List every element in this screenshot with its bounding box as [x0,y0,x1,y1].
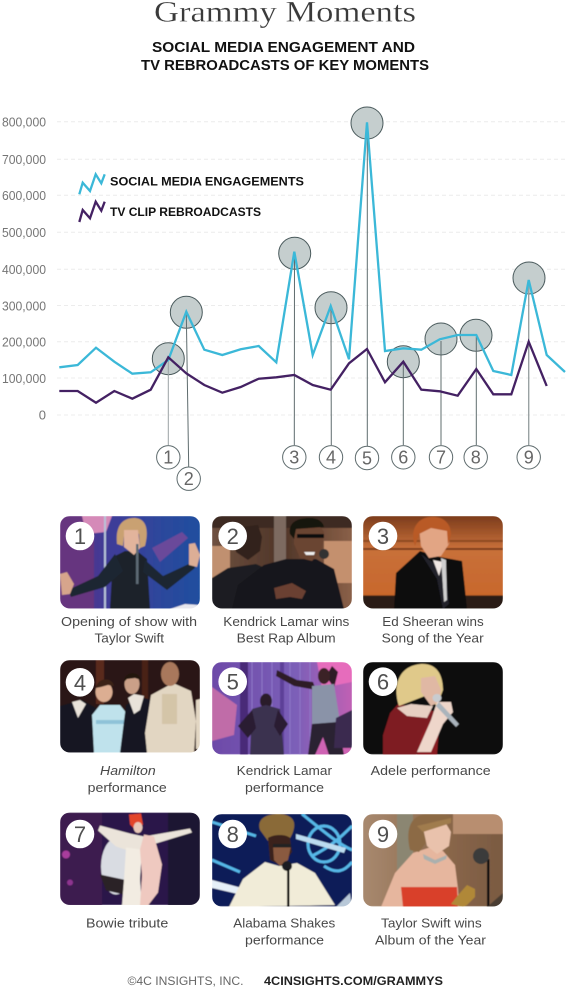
caption 5: performance [245,780,324,795]
caption 9 [375,916,487,948]
badge 4: 4 [74,670,86,695]
numbered markers: 3 [289,448,299,468]
caption 8: performance [245,932,324,948]
y axis labels: 800,000 [2,114,46,130]
caption 4: Hamilton [100,763,156,778]
footer [128,974,443,988]
caption 1: Taylor Swift [94,630,164,646]
caption 1 [61,614,197,646]
moment 6 [363,662,503,778]
footer: ©4C INSIGHTS, INC. [128,974,244,988]
photo: Kendrick Lamar performance [212,662,352,755]
tv clip rebroadcasts line [59,342,547,403]
photo: Bowie tribute [60,812,200,906]
numbered markers: 1 [163,448,173,468]
caption 9: Album of the Year [375,932,487,948]
caption 9: Taylor Swift wins [381,916,482,930]
y axis labels: 700,000 [2,152,46,167]
photo: Hamilton [60,660,200,753]
photo: Taylor Swift wins [363,814,503,907]
line chart [2,107,565,490]
footer: 4CINSIGHTS.COM/GRAMMYS [264,974,443,988]
badge 1: 1 [74,524,86,549]
moment 8 [212,814,352,948]
moment 9 [363,814,503,948]
numbered markers: 6 [398,448,408,468]
caption 2: Best Rap Album [237,630,336,646]
photo: Alabama Shakes [212,814,352,907]
caption 5 [237,763,333,795]
badge 2: 2 [227,524,239,549]
caption 2 [223,614,350,646]
numbered markers: 7 [436,448,446,468]
caption 8 [233,916,336,948]
badge 8: 8 [227,822,239,847]
moment 2 [212,516,352,646]
legend [79,174,304,222]
numbered markers: 5 [362,448,372,468]
moment 1 [60,516,200,646]
social media engagements line [59,122,565,375]
numbered markers: 2 [184,469,194,489]
moment 5 [212,662,352,795]
y axis labels [2,114,46,422]
caption 5: Kendrick Lamar [237,763,333,778]
highlight circles [152,107,545,378]
legend: TV CLIP REBROADCASTS [110,207,261,219]
leader lines [168,125,529,467]
subtitle: TV REBROADCASTS OF KEY MOMENTS [141,58,429,74]
badge 7: 7 [74,822,86,847]
numbered markers: 4 [326,448,336,468]
photo: Adele performance [363,662,503,755]
caption 8: Alabama Shakes [233,916,336,930]
caption 4 [88,763,167,795]
y axis labels: 100,000 [2,371,46,386]
y axis labels: 200,000 [2,334,46,350]
caption 3 [382,614,484,646]
y axis labels: 0 [39,408,46,422]
y axis labels: 300,000 [2,298,46,314]
badge 9: 9 [377,822,389,847]
badge 5: 5 [227,670,239,695]
badge 3: 3 [377,524,389,549]
y axis labels: 400,000 [2,262,46,277]
y axis labels: 500,000 [2,225,46,240]
subtitle [141,40,429,74]
numbered markers: 9 [524,448,534,468]
caption 3: Song of the Year [382,630,484,646]
caption 3: Ed Sheeran wins [382,614,484,629]
caption 1: Opening of show with [61,614,197,629]
legend: SOCIAL MEDIA ENGAGEMENTS [110,176,304,188]
photo: Taylor Swift opening [60,516,200,609]
subtitle: SOCIAL MEDIA ENGAGEMENT AND [152,40,415,56]
moment 7 [60,812,200,930]
moment 3 [363,516,503,646]
caption 2: Kendrick Lamar wins [223,614,350,629]
badge 6: 6 [377,670,389,695]
numbered markers [157,446,540,490]
moment 4 [60,660,200,795]
y axis labels: 600,000 [2,188,46,203]
photo: Kendrick Lamar wins [212,516,352,609]
photo: Ed Sheeran wins [363,516,503,609]
caption 4: performance [88,780,167,795]
numbered markers: 8 [471,448,481,468]
caption 6: Adele performance [371,763,491,778]
caption 7: Bowie tribute [86,916,168,930]
